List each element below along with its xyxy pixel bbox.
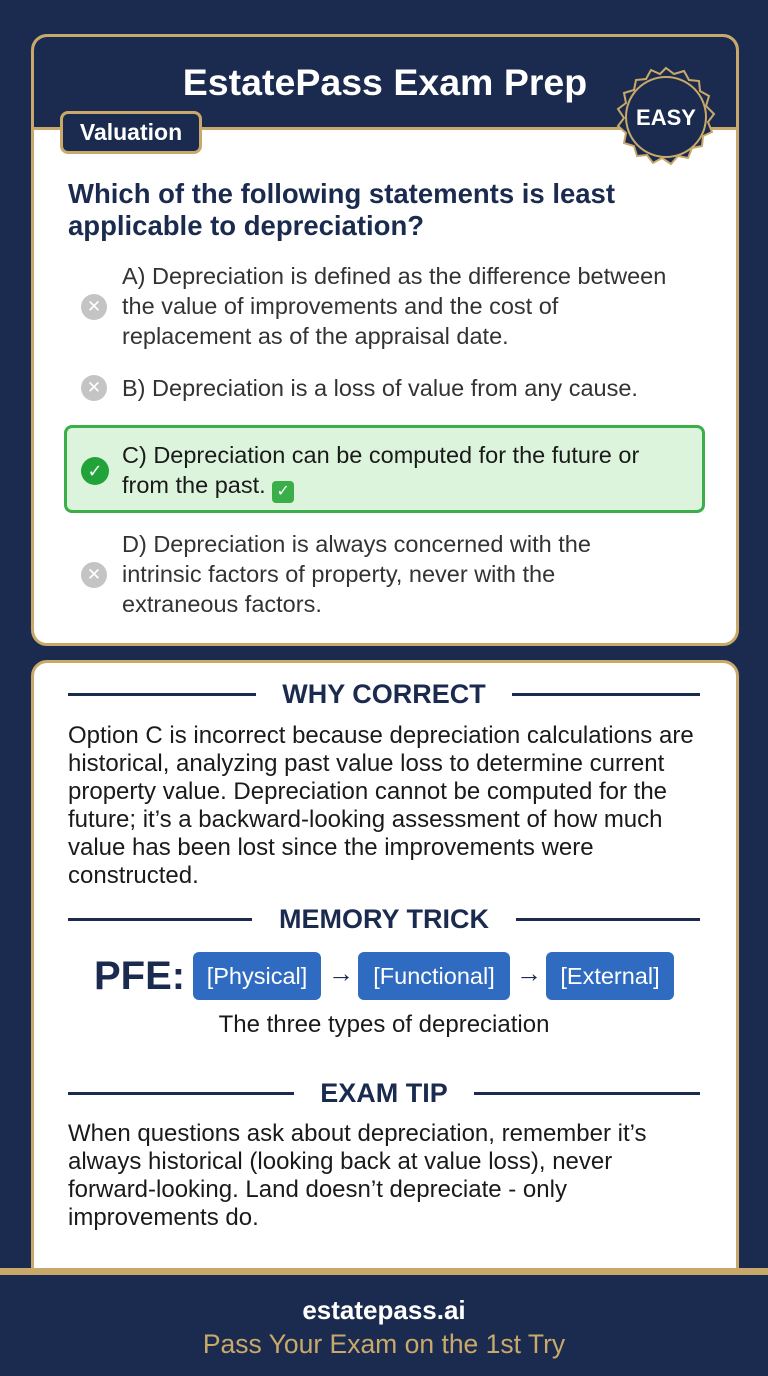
footer tagline: Pass Your Exam on the 1st Try <box>203 1329 565 1359</box>
pill: external: [External] <box>560 963 660 989</box>
badge: EASY: EASY <box>636 105 696 130</box>
pill: functional <box>358 952 510 1000</box>
pill: physical <box>193 952 321 1000</box>
text: exam tip: When questions ask about depreciation, remember it’s always historical (looking back at value loss), never forward‑looking. Land doesn’t depreciate - only improvements do. <box>68 1120 647 1231</box>
option C (correct) <box>64 425 705 513</box>
option B: ✕ <box>87 378 101 397</box>
question text: Which of the following statements is least applicable to depreciation? <box>68 178 615 241</box>
heading: why correct: WHY CORRECT <box>282 679 486 709</box>
caption: The three types of depreciation <box>219 1011 549 1038</box>
pill: functional: [Functional] <box>373 963 495 989</box>
option D: D) Depreciation is always concerned with the intrinsic factors of property, never with the extraneous factors. <box>122 531 591 617</box>
tag: Valuation: Valuation <box>80 119 182 145</box>
option C (correct): ✓ <box>276 483 290 500</box>
badge: EASY <box>616 66 716 166</box>
heading: why correct <box>68 679 700 709</box>
title: EstatePass Exam Prep <box>183 61 587 103</box>
arrow: → <box>516 958 542 988</box>
footer site: estatepass.ai <box>302 1295 466 1325</box>
option A: ✕ <box>87 297 101 316</box>
option B: B) Depreciation is a loss of value from any cause. <box>122 375 638 401</box>
header band <box>34 37 736 130</box>
footer <box>0 1268 768 1376</box>
card: explanation <box>31 660 739 1300</box>
heading: memory trick: MEMORY TRICK <box>279 904 489 934</box>
heading: exam tip <box>68 1078 700 1108</box>
heading: exam tip: EXAM TIP <box>320 1078 448 1108</box>
option A: A) Depreciation is defined as the difference between the value of improvements and the cost of replacement as of the appraisal date. <box>122 263 666 349</box>
pill: external <box>546 952 674 1000</box>
option C (correct): C) Depreciation can be computed for the future or from the past. <box>122 442 639 498</box>
arrow: → <box>328 958 354 988</box>
tag: Valuation <box>60 111 202 154</box>
pill: physical: [Physical] <box>207 963 307 989</box>
card: question <box>31 34 739 646</box>
text: why correct: Option C is incorrect because depreciation calculations are historical, analyzing past value loss to determine current property value. Depreciation cannot be computed for the future; it’s a backward-looking assessment of how much value has been lost since the improvements were constructed. <box>68 722 694 889</box>
heading: memory trick <box>68 904 700 934</box>
memory trick diagram: PFE: <box>94 954 185 998</box>
option C (correct): ✓ <box>87 461 103 481</box>
option D: ✕ <box>87 565 101 584</box>
